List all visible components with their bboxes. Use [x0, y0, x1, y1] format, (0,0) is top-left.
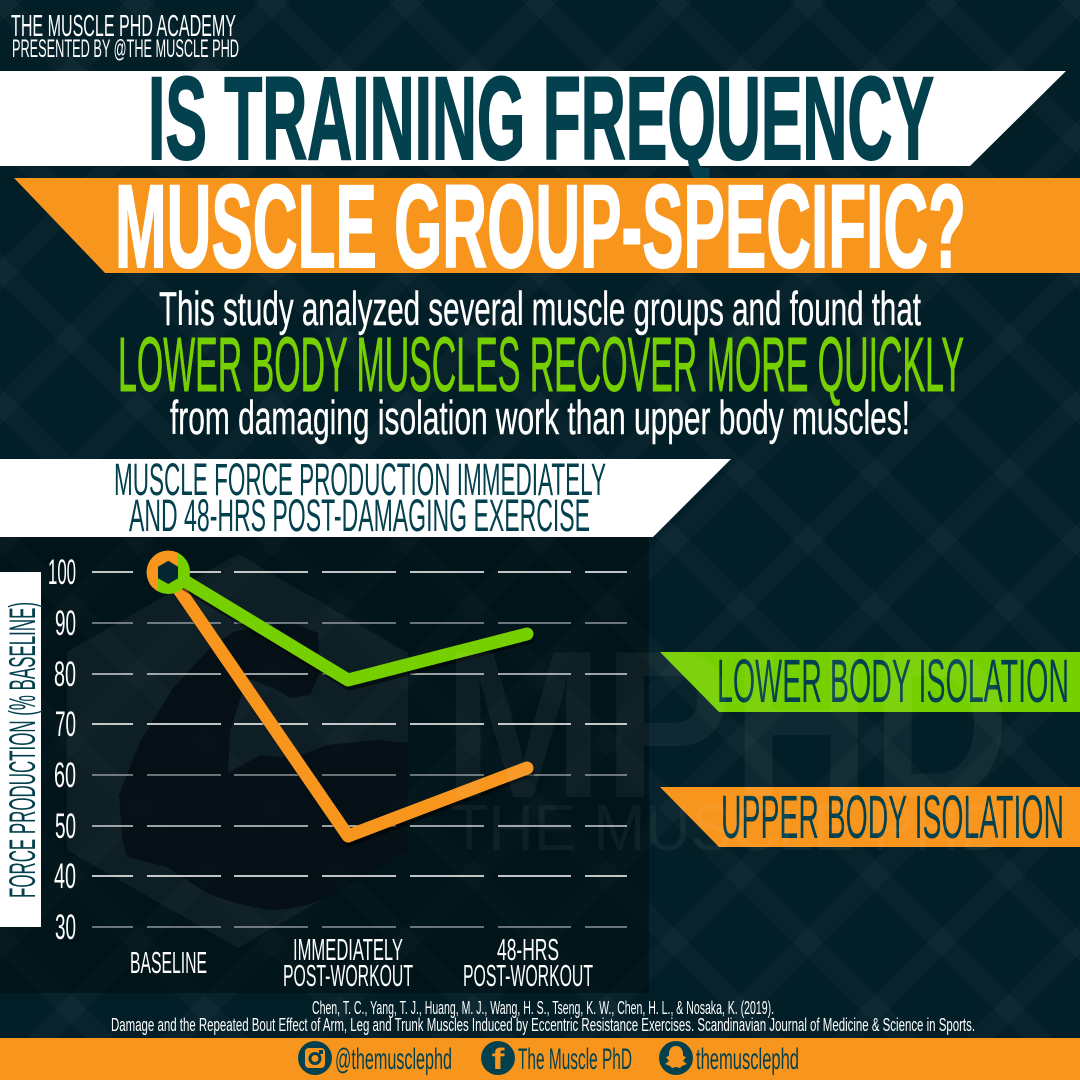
- line: upper body isolation: [169, 575, 529, 840]
- header: academy text: [11, 8, 239, 63]
- y-axis numbers: 60: [54, 756, 76, 795]
- y-axis numbers: 30: [55, 908, 76, 947]
- header: academy text: THE MUSCLE PHD ACADEMY: [11, 8, 236, 43]
- x-axis labels: 48-HRS: [497, 932, 559, 967]
- watermark: MPhD wordmark: MPHD: [443, 607, 1010, 842]
- chart title banner: AND 48-HRS POST-DAMAGING EXERCISE: [129, 490, 590, 541]
- x-axis labels: [130, 932, 593, 993]
- header: academy text: PRESENTED BY @THE MUSCLE PHD: [12, 35, 239, 63]
- instagram handle: [298, 1041, 452, 1076]
- facebook handle: [481, 1041, 632, 1076]
- facebook handle: The Muscle PhD: [518, 1043, 632, 1076]
- instagram handle: @themusclephd: [335, 1043, 452, 1076]
- references: [111, 998, 975, 1035]
- x-axis labels: IMMEDIATELY: [293, 932, 403, 967]
- gridlines: [92, 572, 627, 927]
- chart title banner: [0, 454, 731, 541]
- y-axis numbers: 80: [54, 655, 76, 694]
- line: lower body isolation: [170, 572, 529, 684]
- x-axis labels: POST-WORKOUT: [463, 958, 593, 993]
- watermark: MPhD wordmark: THE MUSCLE PHD: [450, 791, 1005, 864]
- baseline marker: [147, 551, 190, 594]
- y-axis numbers: 40: [54, 857, 76, 896]
- y-axis numbers: [48, 553, 76, 947]
- summary text: [118, 282, 964, 444]
- y-axis label: [0, 572, 43, 927]
- snapchat handle: themusclephd: [696, 1043, 799, 1076]
- chart title banner: MUSCLE FORCE PRODUCTION IMMEDIATELY: [114, 454, 606, 505]
- x-axis labels: BASELINE: [130, 945, 207, 980]
- y-axis numbers: 90: [55, 604, 76, 643]
- footer bar: [0, 1038, 1080, 1080]
- text: 100: [48, 553, 76, 592]
- y-axis numbers: 70: [55, 705, 76, 744]
- facebook handle: f: [492, 1043, 506, 1076]
- x-axis labels: POST-WORKOUT: [283, 958, 413, 993]
- y-axis numbers: 50: [55, 807, 76, 846]
- references: Chen, T. C., Yang, T. J., Huang, M. J., Wang, H. S., Tseng, K. W., Chen, H. L., & Nosaka, K. (2019).: [312, 998, 774, 1018]
- snapchat handle: [659, 1041, 799, 1076]
- y-axis label: FORCE PRODUCTION (% BASELINE): [2, 602, 43, 898]
- chart background panel: [0, 537, 649, 993]
- watermark: hexagon and flexed arm: [67, 554, 408, 948]
